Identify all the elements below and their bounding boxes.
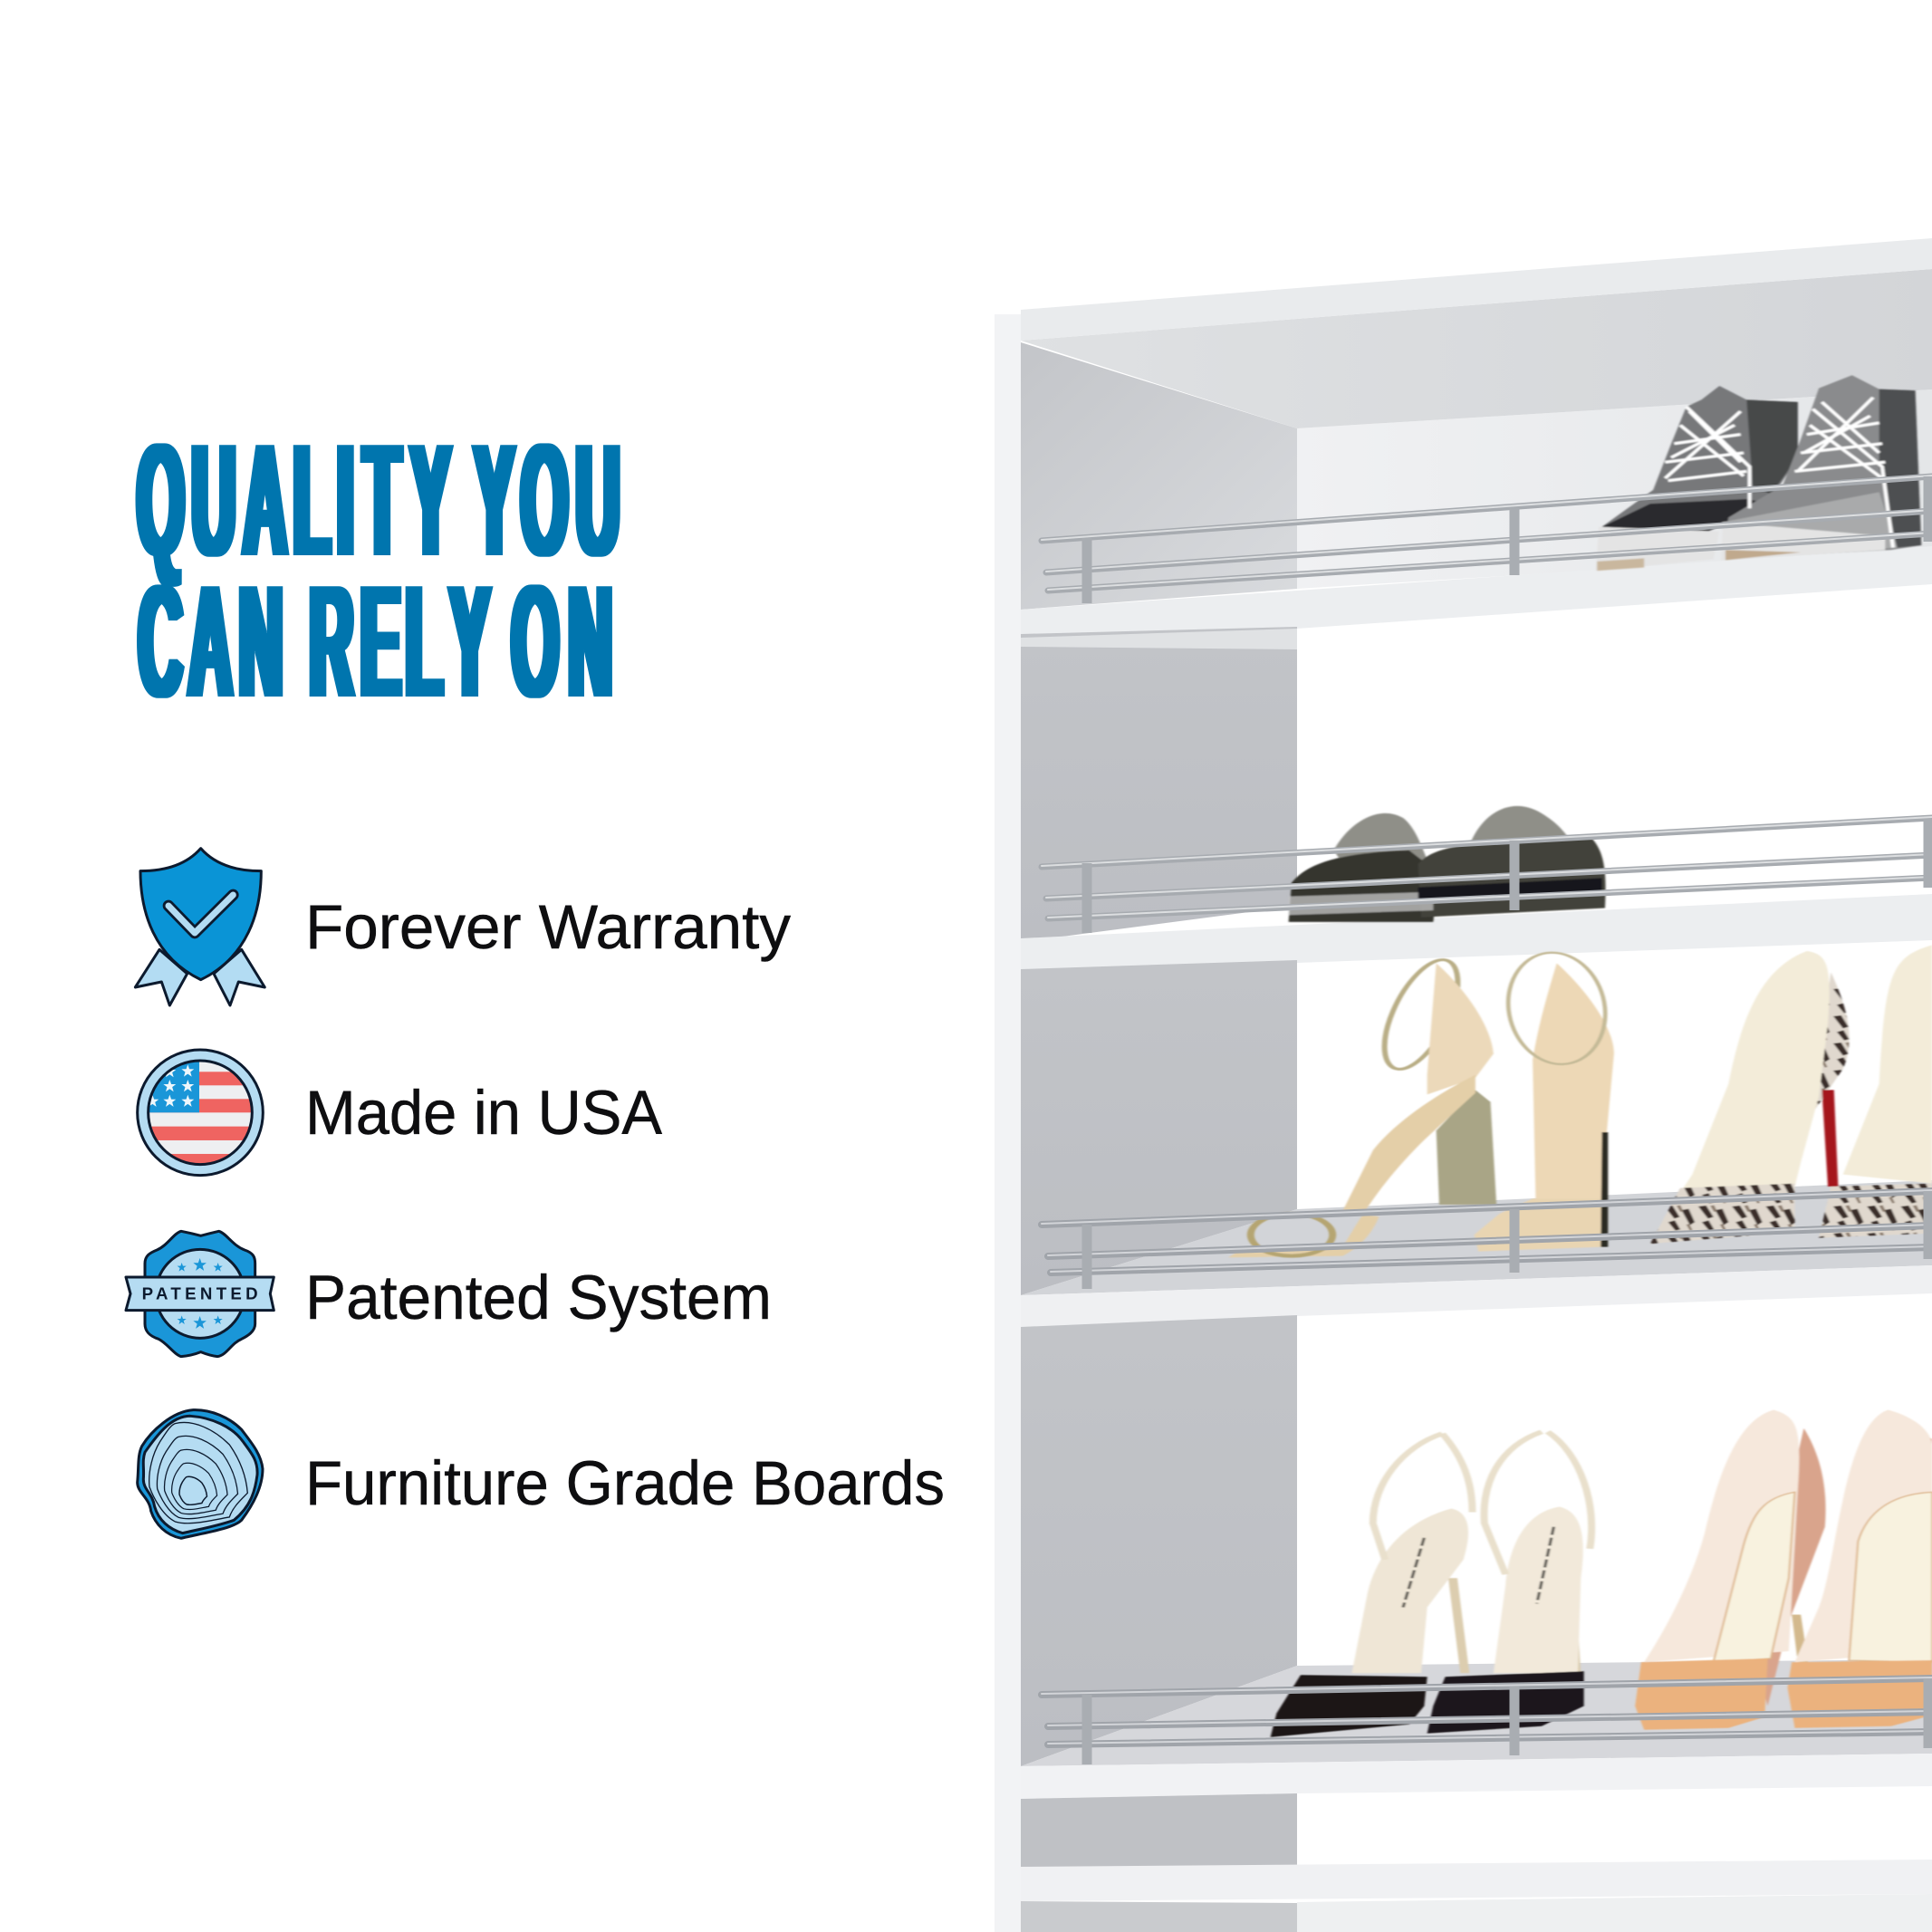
shoes: cream pumps with snakeskin xyxy=(1650,945,1932,1244)
icon: patented seal: PATENTED xyxy=(142,1284,258,1303)
wire rail: shelf 4 xyxy=(1042,1677,1932,1764)
title: QUALITY YOU xyxy=(137,411,620,590)
label: patented system: Patented System xyxy=(305,1263,772,1332)
icon: wood rings xyxy=(138,1410,263,1538)
title xyxy=(137,411,620,731)
icon: patented seal xyxy=(126,1231,274,1357)
icon: american flag badge xyxy=(136,1050,265,1176)
cabinet carcass xyxy=(995,238,1932,1932)
wire rail: shelf 2 xyxy=(1042,817,1932,933)
label: made in usa: Made in USA xyxy=(305,1078,662,1148)
wire rail: shelf 3 xyxy=(1042,1190,1932,1289)
wire rail: shelf 1 xyxy=(1042,476,1932,603)
title: CAN RELY ON xyxy=(139,553,612,731)
feature list xyxy=(126,849,945,1538)
shoes: dark slippers xyxy=(1289,806,1606,922)
shoes: cream slingbacks with black toes xyxy=(1271,1432,1591,1737)
label: forever warranty: Forever Warranty xyxy=(305,892,791,962)
icon: shield with check and ribbons xyxy=(135,849,264,1005)
shoes: beige ankle strap heels xyxy=(1228,951,1614,1257)
shoes: nude pumps xyxy=(1635,1410,1932,1730)
shoes: grey sneakers xyxy=(1596,375,1921,571)
label: furniture grade boards: Furniture Grade Boards xyxy=(305,1448,945,1518)
